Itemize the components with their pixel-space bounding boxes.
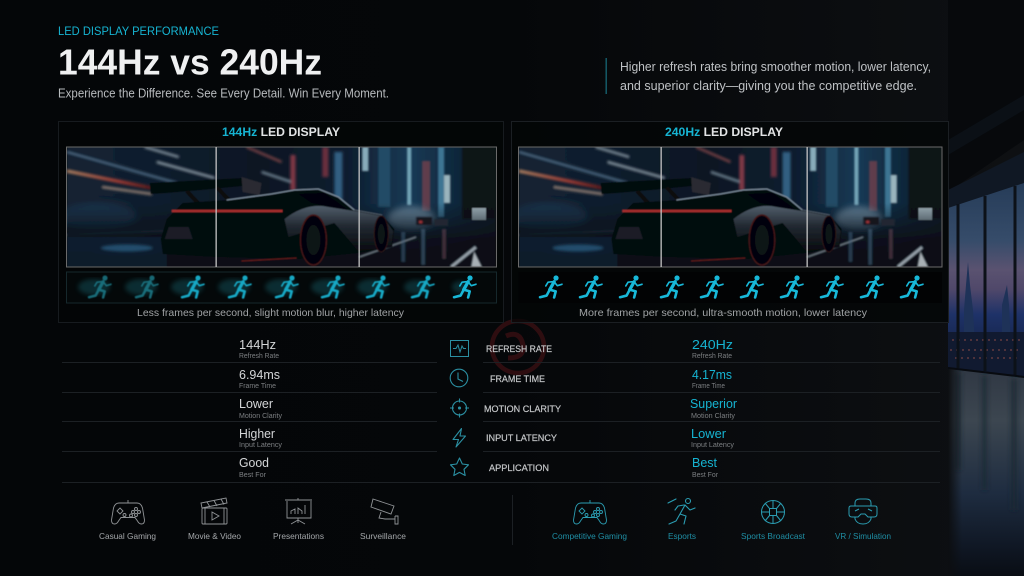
icon: refresh rate pulse bbox=[450, 340, 468, 356]
column: 144Hz values: 144Hz bbox=[239, 338, 276, 352]
column: metric icons and names bbox=[450, 340, 561, 476]
intro callout: Higher refresh rates bring smoother motion, lower latency, bbox=[620, 60, 931, 74]
icon: clock bbox=[450, 369, 468, 387]
label: input latency: INPUT LATENCY bbox=[486, 433, 557, 443]
logo ring mark bbox=[492, 321, 544, 373]
column: 144Hz values: Lower bbox=[239, 397, 273, 411]
label: movie and video: Movie & Video bbox=[188, 531, 241, 541]
icon: presentation screen bbox=[285, 498, 312, 524]
column: 240Hz values: Best bbox=[692, 456, 718, 470]
column: 240Hz values: Motion Clarity bbox=[691, 413, 736, 420]
caption: 240Hz: More frames per second, ultra-smooth motion, lower latency bbox=[579, 307, 868, 319]
icon: esports runner bbox=[668, 498, 695, 524]
motion image: 240Hz car bbox=[509, 147, 942, 267]
label: competitive gaming: Competitive Gaming bbox=[552, 531, 627, 541]
column: 240Hz values: Lower bbox=[691, 427, 726, 441]
column: 240Hz values: Frame Time bbox=[692, 383, 725, 390]
use cases: 144Hz bbox=[99, 498, 406, 541]
column: 144Hz values: Best For bbox=[239, 472, 267, 479]
label: motion clarity: MOTION CLARITY bbox=[484, 404, 561, 414]
label: frame time: FRAME TIME bbox=[490, 374, 545, 384]
column: 144Hz values: Input Latency bbox=[239, 442, 283, 449]
column: 144Hz values: Motion Clarity bbox=[239, 413, 282, 420]
label: refresh rate: REFRESH RATE bbox=[486, 344, 552, 354]
column: 144Hz values: Good bbox=[239, 456, 269, 470]
column: 144Hz values: Higher bbox=[239, 427, 275, 441]
intro callout: and superior clarity—giving you the competitive edge. bbox=[620, 79, 917, 93]
column: 240Hz values: 4.17ms bbox=[692, 368, 732, 382]
icon: surveillance camera bbox=[371, 499, 398, 524]
icon: star bbox=[450, 458, 468, 476]
label: esports: Esports bbox=[668, 531, 696, 541]
label: casual gaming: Casual Gaming bbox=[99, 531, 156, 541]
icon: competitive gaming controller bbox=[574, 500, 606, 524]
panel: 240Hz LED display bbox=[509, 122, 948, 322]
background: reflective floor bbox=[948, 369, 1024, 576]
runner strip: 144Hz with motion blur bbox=[66, 272, 496, 303]
comparison table rows bbox=[62, 362, 940, 482]
title: 144Hz vs 240Hz bbox=[58, 42, 322, 82]
icon: sports ball bbox=[762, 500, 784, 524]
label: surveillance: Surveillance bbox=[360, 531, 406, 541]
icon: movie clapper bbox=[201, 498, 227, 524]
column: 240Hz values: 240Hz bbox=[692, 338, 733, 352]
subtitle: Experience the Difference. See Every Detail. Win Every Moment. bbox=[58, 86, 389, 100]
icon: casual gaming controller bbox=[112, 500, 144, 524]
panel: 144Hz LED display bbox=[57, 122, 504, 322]
column: 240Hz values: Superior bbox=[690, 397, 737, 411]
use cases: 240Hz bbox=[552, 498, 891, 541]
panel heading: 240Hz: 240Hz LED DISPLAY bbox=[665, 125, 783, 139]
motion image: 144Hz car bbox=[57, 147, 496, 267]
icon: lightning bolt bbox=[453, 428, 466, 447]
icon: crosshair bbox=[450, 398, 469, 418]
label: presentations: Presentations bbox=[273, 531, 324, 541]
use case divider bbox=[512, 495, 514, 545]
column: 144Hz values bbox=[239, 338, 283, 479]
background: window with city view bbox=[948, 0, 1024, 379]
column: 144Hz values: 6.94ms bbox=[239, 368, 280, 382]
icon: VR headset bbox=[849, 499, 877, 524]
eyebrow heading: LED DISPLAY PERFORMANCE bbox=[58, 26, 219, 38]
caption: 144Hz: Less frames per second, slight motion blur, higher latency bbox=[137, 307, 405, 319]
column: 144Hz values: Frame Time bbox=[239, 383, 276, 390]
runner strip: 240Hz sharp bbox=[518, 272, 942, 303]
column: 144Hz values: Refresh Rate bbox=[239, 353, 279, 360]
label: VR simulation: VR / Simulation bbox=[835, 531, 891, 541]
label: application: APPLICATION bbox=[489, 463, 549, 473]
column: 240Hz values: Refresh Rate bbox=[692, 353, 732, 360]
panel heading: 144Hz: 144Hz LED DISPLAY bbox=[222, 125, 340, 139]
column: 240Hz values: Input Latency bbox=[691, 442, 735, 449]
column: 240Hz values: Best For bbox=[692, 472, 719, 479]
intro callout bbox=[606, 58, 931, 94]
label: sports broadcast: Sports Broadcast bbox=[741, 531, 806, 541]
column: 240Hz values bbox=[690, 338, 737, 479]
